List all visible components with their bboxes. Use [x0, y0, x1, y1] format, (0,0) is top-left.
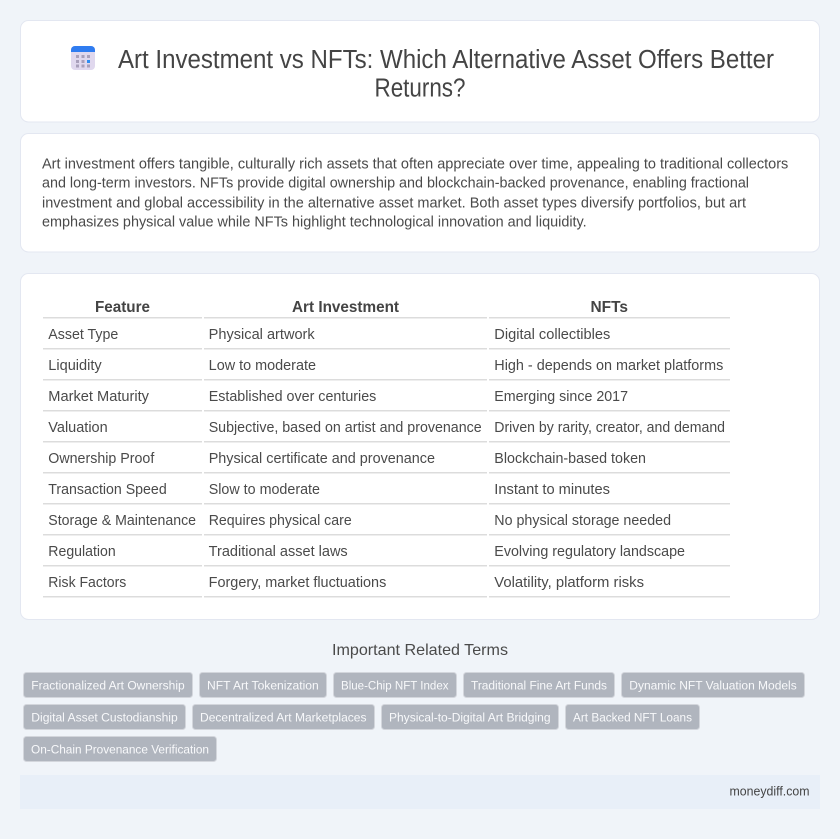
panel: related term tags	[24, 672, 804, 762]
table row: Transaction Speed: Slow to moderate	[209, 482, 320, 498]
table header row: NFTs	[590, 299, 628, 316]
text block: introduction paragraph: and long-term investors. NFTs provide digital ownership and blockchain-backed provenance, enabling fractional	[42, 175, 749, 191]
panel: title card	[20, 20, 820, 122]
text block: introduction paragraph	[42, 156, 788, 231]
table row: Valuation	[43, 420, 730, 442]
tag: Dynamic NFT Valuation Models	[622, 672, 804, 698]
table header row: Feature	[95, 299, 150, 316]
table row: Asset Type	[43, 327, 730, 350]
table row: Risk Factors: Risk Factors	[48, 575, 126, 591]
tag: Digital Asset Custodianship: Digital Asset Custodianship	[31, 710, 178, 724]
table row: Ownership Proof: Blockchain-based token	[494, 451, 646, 467]
table row: Market Maturity: Emerging since 2017	[494, 389, 628, 405]
icon: calendar	[71, 46, 95, 70]
panel: introduction	[20, 134, 820, 252]
table row: Market Maturity: Market Maturity	[48, 389, 150, 405]
table row: Transaction Speed: Instant to minutes	[494, 482, 610, 498]
table row: Liquidity: Liquidity	[48, 358, 102, 374]
table row: Asset Type: Physical artwork	[209, 327, 316, 343]
tag: NFT Art Tokenization: NFT Art Tokenization	[207, 678, 319, 692]
table row: Ownership Proof: Ownership Proof	[48, 451, 155, 467]
tag: Dynamic NFT Valuation Models: Dynamic NFT Valuation Models	[629, 678, 797, 692]
table row: Regulation	[43, 544, 730, 566]
panel: comparison table	[20, 274, 820, 620]
text block: introduction paragraph: investment and global accessibility in the alternative asset market. Both asset types diversify portfolios, but art	[42, 195, 746, 211]
table row: Regulation: Evolving regulatory landscape	[494, 544, 685, 560]
footer bar	[20, 775, 820, 809]
table row: Liquidity: Low to moderate	[209, 358, 316, 374]
tag: Blue-Chip NFT Index	[334, 672, 456, 698]
tag: Blue-Chip NFT Index: Blue-Chip NFT Index	[341, 678, 449, 692]
tag: Fractionalized Art Ownership: Fractionalized Art Ownership	[31, 678, 185, 692]
table row: Storage & Maintenance: Requires physical care	[209, 513, 352, 529]
table row: Risk Factors	[43, 575, 730, 598]
table row: Storage & Maintenance: No physical storage needed	[494, 513, 671, 529]
tag: Traditional Fine Art Funds	[464, 672, 614, 698]
table row: Liquidity: High - depends on market platforms	[494, 358, 723, 374]
table row: Transaction Speed	[43, 482, 730, 504]
table row: Asset Type: Digital collectibles	[494, 327, 610, 343]
table row: Transaction Speed: Transaction Speed	[48, 482, 167, 498]
table row: Asset Type: Asset Type	[48, 327, 118, 343]
tag: Traditional Fine Art Funds: Traditional Fine Art Funds	[471, 678, 607, 692]
text block: introduction paragraph: Art investment offers tangible, culturally rich assets that often appreciate over time, appealing to traditional collectors	[42, 156, 788, 172]
title: Art Investment vs NFTs: Which Alternative Asset Offers Better	[118, 46, 774, 74]
table row: Market Maturity	[43, 389, 730, 412]
tag: On-Chain Provenance Verification: On-Chain Provenance Verification	[31, 742, 209, 756]
tag: Decentralized Art Marketplaces: Decentralized Art Marketplaces	[200, 710, 366, 724]
table row: Liquidity	[43, 358, 730, 380]
table row: Ownership Proof: Physical certificate and provenance	[209, 451, 435, 467]
text block: introduction paragraph: emphasizes physical value while NFTs highlight technological innovation and liquidity.	[42, 215, 587, 231]
table row: Valuation: Valuation	[48, 420, 108, 436]
table row: Storage & Maintenance: Storage & Maintenance	[48, 513, 196, 529]
heading: important related terms: Important Related Terms	[332, 642, 508, 659]
tag: Physical-to-Digital Art Bridging	[382, 704, 558, 730]
table row: Risk Factors: Forgery, market fluctuations	[209, 575, 386, 591]
table row: Regulation: Regulation	[48, 544, 116, 560]
tag: Fractionalized Art Ownership	[24, 672, 192, 698]
tag: Physical-to-Digital Art Bridging: Physical-to-Digital Art Bridging	[389, 710, 551, 724]
table header row	[43, 299, 730, 318]
table row: Regulation: Traditional asset laws	[209, 544, 348, 560]
footer source text: moneydiff.com	[730, 784, 810, 799]
table row: Ownership Proof	[43, 451, 730, 474]
table row: Market Maturity: Established over centuries	[209, 389, 376, 405]
tag: Art Backed NFT Loans: Art Backed NFT Loans	[573, 710, 692, 724]
table row: Risk Factors: Volatility, platform risks	[494, 575, 644, 591]
title: Returns?	[374, 74, 466, 102]
tag: NFT Art Tokenization	[200, 672, 326, 698]
tag: Art Backed NFT Loans	[566, 704, 700, 730]
table row: Valuation: Driven by rarity, creator, and demand	[494, 420, 725, 436]
tag: Digital Asset Custodianship	[24, 704, 186, 730]
title	[118, 46, 774, 102]
table header row: Art Investment	[292, 299, 400, 316]
table row: Storage & Maintenance	[43, 513, 730, 536]
tag: On-Chain Provenance Verification	[24, 736, 216, 762]
table row: Valuation: Subjective, based on artist and provenance	[209, 420, 482, 436]
tag: Decentralized Art Marketplaces	[192, 704, 374, 730]
